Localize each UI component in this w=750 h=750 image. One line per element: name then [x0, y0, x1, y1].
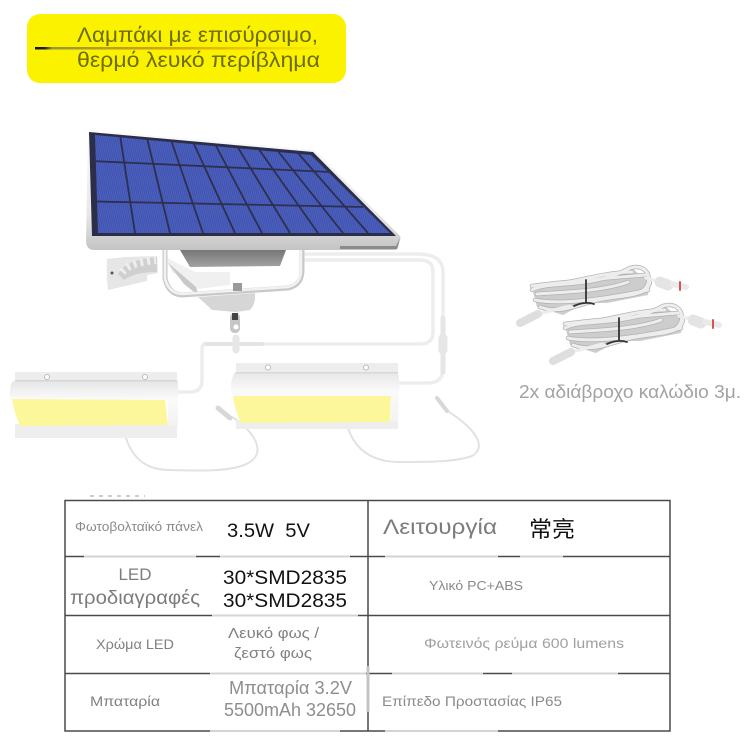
- cable caption: 2x αδιάβροχο καλώδιο 3μ.: [519, 382, 741, 402]
- mounting bracket: [107, 250, 302, 333]
- cell: battery value 1: Μπαταρία 3.2V: [229, 678, 352, 698]
- cell: battery value 2: 5500mAh 32650: [224, 700, 356, 720]
- cell: panel value: 3.5W 5V: [227, 521, 310, 542]
- cell: function value: 常亮: [529, 517, 575, 542]
- connecting wires: [126, 254, 479, 471]
- heading badge: [27, 14, 346, 83]
- shade under panel: [180, 250, 286, 267]
- cell: protection level: Επίπεδο Προστασίας IP65: [382, 693, 562, 709]
- right lamp: [231, 363, 399, 429]
- heading badge: Λαμπάκι με επισύρσιμο,: [77, 24, 318, 47]
- photovoltaic cells: [89, 132, 396, 236]
- right lamp light panel: [233, 396, 391, 423]
- cell: function label: Λειτουργία: [383, 516, 497, 539]
- cell: LED colour label: Χρώμα LED: [96, 636, 174, 652]
- solar panel: [86, 130, 400, 250]
- hook: [230, 313, 240, 333]
- left lamp: [10, 372, 178, 438]
- left lamp light panel: [12, 399, 168, 426]
- heading badge: θερμό λευκό περίβλημα: [77, 49, 320, 72]
- cell: battery label: Μπαταρία: [90, 693, 160, 709]
- cable coil 2: [553, 305, 719, 361]
- specification table: [65, 496, 670, 731]
- cell: LED value 1: 30*SMD2835: [223, 568, 347, 589]
- cell: LED label: LED: [118, 565, 152, 584]
- cell: LED colour value 2: ζεστό φως: [234, 645, 312, 662]
- pivot base: [198, 293, 255, 312]
- cell: material: Υλικό PC+ABS: [429, 578, 523, 593]
- cell: luminous flux: Φωτεινός ρεύμα 600 lumens: [424, 635, 624, 651]
- cell: photovoltaic panel: Φωτοβολταϊκό πάνελ: [75, 519, 204, 534]
- panel frame: [86, 130, 400, 250]
- cell: specifications label: προδιαγραφές: [70, 588, 200, 609]
- wall mount: [107, 256, 158, 290]
- cell: LED colour value 1: Λευκό φως /: [228, 625, 320, 642]
- U frame: [165, 250, 302, 295]
- cable coil 1: [520, 267, 686, 323]
- cell: LED value 2: 30*SMD2835: [223, 591, 347, 612]
- arm: [167, 258, 230, 289]
